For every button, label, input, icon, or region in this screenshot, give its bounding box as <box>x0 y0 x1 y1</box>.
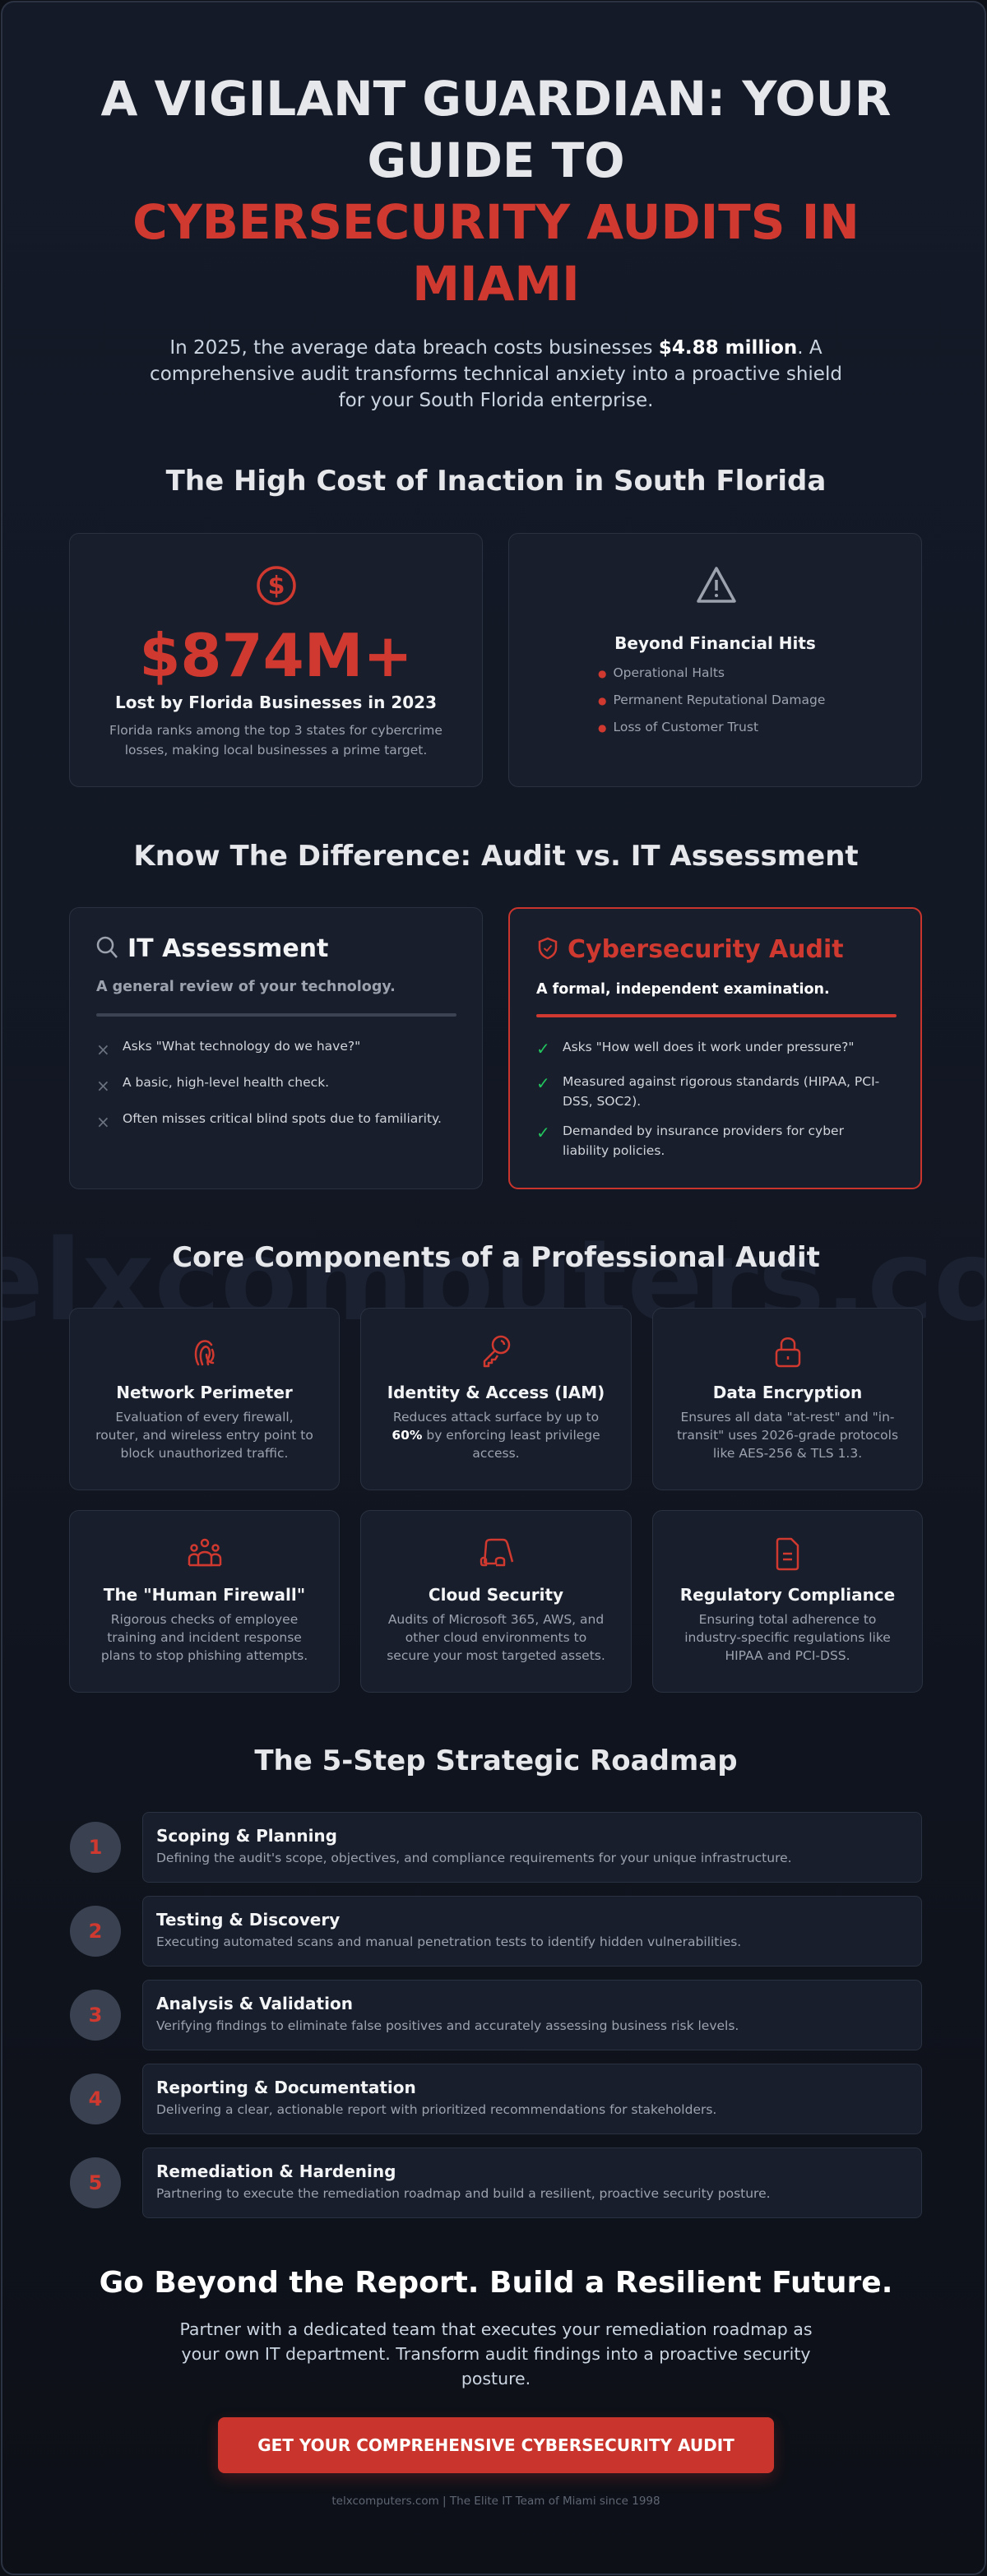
card: IAM: Identity & Access (IAM) <box>387 1383 605 1402</box>
card: network perimeter: Evaluation of every firewall, router, and wireless entry point to block unauthorized traffic. <box>95 1410 313 1461</box>
step 1 <box>70 1812 922 1883</box>
step 2 <box>70 1896 922 1967</box>
heading: core components: Core Components of a Professional Audit <box>172 1241 820 1274</box>
heading: CTA: Go Beyond the Report. Build a Resilient Future. <box>100 2266 892 2300</box>
list: ✓ <box>536 1073 550 1093</box>
list <box>536 1039 879 1158</box>
card: compliance: Regulatory Compliance <box>680 1585 895 1605</box>
heading: roadmap: The 5-Step Strategic Roadmap <box>254 1744 738 1777</box>
list: ✓ <box>536 1123 550 1142</box>
step 4: Reporting & Documentation <box>156 2078 416 2097</box>
description: Florida ranks among the top 3 states for cybercrime losses, making local businesses a prime target. <box>109 723 443 758</box>
heading with shield icon: Cybersecurity Audit <box>568 935 844 964</box>
step 5: Partnering to execute the remediation roadmap and build a resilient, proactive security posture. <box>156 2186 771 2201</box>
card: encryption: Ensures all data "at-rest" and "in-transit" uses 2026-grade protocols like AES-256 & TLS 1.3. <box>677 1410 898 1461</box>
subtitle: A general review of your technology. <box>96 979 396 995</box>
icon: dollar <box>257 566 296 605</box>
step 3: Verifying findings to eliminate false positives and accurately assessing business risk levels. <box>156 2018 739 2033</box>
card: network perimeter <box>69 1308 340 1490</box>
subtitle: A formal, independent examination. <box>536 981 830 998</box>
card: human firewall: The "Human Firewall" <box>104 1585 305 1605</box>
list: Asks "How well does it work under pressure?" <box>563 1040 855 1054</box>
card: IAM: Reduces attack surface by up to 60% by enforcing least privilege access. <box>392 1410 600 1461</box>
step 5 <box>70 2147 922 2218</box>
title <box>100 71 891 312</box>
CTA button: GET YOUR COMPREHENSIVE CYBERSECURITY AUDIT <box>257 2435 734 2455</box>
icon: people <box>188 1538 222 1566</box>
card: IAM <box>360 1308 632 1490</box>
icon: fingerprint <box>194 1340 215 1365</box>
icon: document <box>776 1538 799 1571</box>
list: Often misses critical blind spots due to familiarity. <box>123 1111 442 1126</box>
stat label: Lost by Florida Businesses in 2023 <box>115 693 437 712</box>
card: cloud security <box>360 1510 632 1693</box>
card: encryption: Data Encryption <box>713 1383 862 1402</box>
card: cloud security: Cloud Security <box>429 1585 563 1605</box>
step 1: 1 <box>89 1836 102 1859</box>
title: MIAMI <box>412 256 580 312</box>
step 3: 3 <box>89 2004 102 2027</box>
card: human firewall: Rigorous checks of employee training and incident response plans to stop phishing attempts. <box>101 1612 308 1663</box>
CTA button <box>218 2417 774 2473</box>
card: cloud security: Audits of Microsoft 365, AWS, and other cloud environments to secure your most targeted assets. <box>387 1612 605 1663</box>
step 1: Scoping & Planning <box>156 1826 337 1846</box>
panel: beyond financial <box>508 533 922 787</box>
bullet list <box>598 665 825 734</box>
icon: dollar: $ <box>268 572 285 600</box>
icon: warning <box>697 567 736 603</box>
list: × <box>96 1076 110 1096</box>
heading with search icon: IT Assessment <box>127 934 328 963</box>
list: A basic, high-level health check. <box>123 1075 329 1090</box>
bullet list: ● Loss of Customer Trust <box>598 720 758 734</box>
title: GUIDE TO <box>367 132 625 188</box>
heading: high cost: The High Cost of Inaction in South Florida <box>166 465 826 498</box>
card: encryption <box>652 1308 923 1490</box>
step 3 <box>70 1980 922 2050</box>
intro text: In 2025, the average data breach costs businesses $4.88 million. A comprehensive audit transforms technical anxiety into a proactive shield for your South Florida enterprise. <box>150 337 842 411</box>
list: Measured against rigorous standards (HIPAA, PCI-DSS, SOC2). <box>563 1074 879 1109</box>
step 5: 5 <box>89 2171 102 2194</box>
step 2: Executing automated scans and manual penetration tests to identify hidden vulnerabilities. <box>156 1934 741 1949</box>
stat: $874M+ <box>139 621 413 690</box>
title: CYBERSECURITY AUDITS IN <box>132 194 860 250</box>
heading: difference: Know The Difference: Audit vs. IT Assessment <box>133 840 859 873</box>
step 2: Testing & Discovery <box>156 1910 340 1930</box>
list: × <box>96 1112 110 1132</box>
list: ✓ <box>536 1039 550 1059</box>
icon: lock <box>775 1337 801 1367</box>
panel: IT assessment <box>69 907 483 1189</box>
icon: key <box>484 1336 510 1367</box>
step 4 <box>70 2064 922 2134</box>
list <box>96 1039 442 1132</box>
step 2: 2 <box>89 1920 102 1943</box>
title: A VIGILANT GUARDIAN: YOUR <box>101 71 891 127</box>
footer: telxcomputers.com | The Elite IT Team of Miami since 1998 <box>331 2495 660 2508</box>
icon: cloud <box>480 1538 513 1566</box>
card: human firewall <box>69 1510 340 1693</box>
card: compliance <box>652 1510 923 1693</box>
step 1: Defining the audit's scope, objectives, and compliance requirements for your unique infrastructure. <box>156 1851 792 1865</box>
step 4: 4 <box>89 2087 102 2110</box>
list: × <box>96 1040 110 1059</box>
list: Asks "What technology do we have?" <box>123 1039 360 1054</box>
step 4: Delivering a clear, actionable report with prioritized recommendations for stakeholders. <box>156 2102 716 2117</box>
heading: Beyond Financial Hits <box>614 633 816 653</box>
card: network perimeter: Network Perimeter <box>116 1383 293 1402</box>
bullet list: ● Permanent Reputational Damage <box>598 693 825 707</box>
CTA text: Partner with a dedicated team that executes your remediation roadmap as your own IT department. Transform audit findings into a proactive security posture. <box>179 2319 813 2388</box>
card: compliance: Ensuring total adherence to industry-specific regulations like HIPAA and PCI-DSS. <box>684 1612 891 1663</box>
step 5: Remediation & Hardening <box>156 2161 396 2181</box>
bullet list: ● Operational Halts <box>598 665 725 680</box>
panel: cybersecurity audit <box>508 907 922 1189</box>
step 3: Analysis & Validation <box>156 1994 353 2013</box>
list: Demanded by insurance providers for cyber liability policies. <box>563 1124 844 1158</box>
panel: florida losses <box>69 533 483 787</box>
